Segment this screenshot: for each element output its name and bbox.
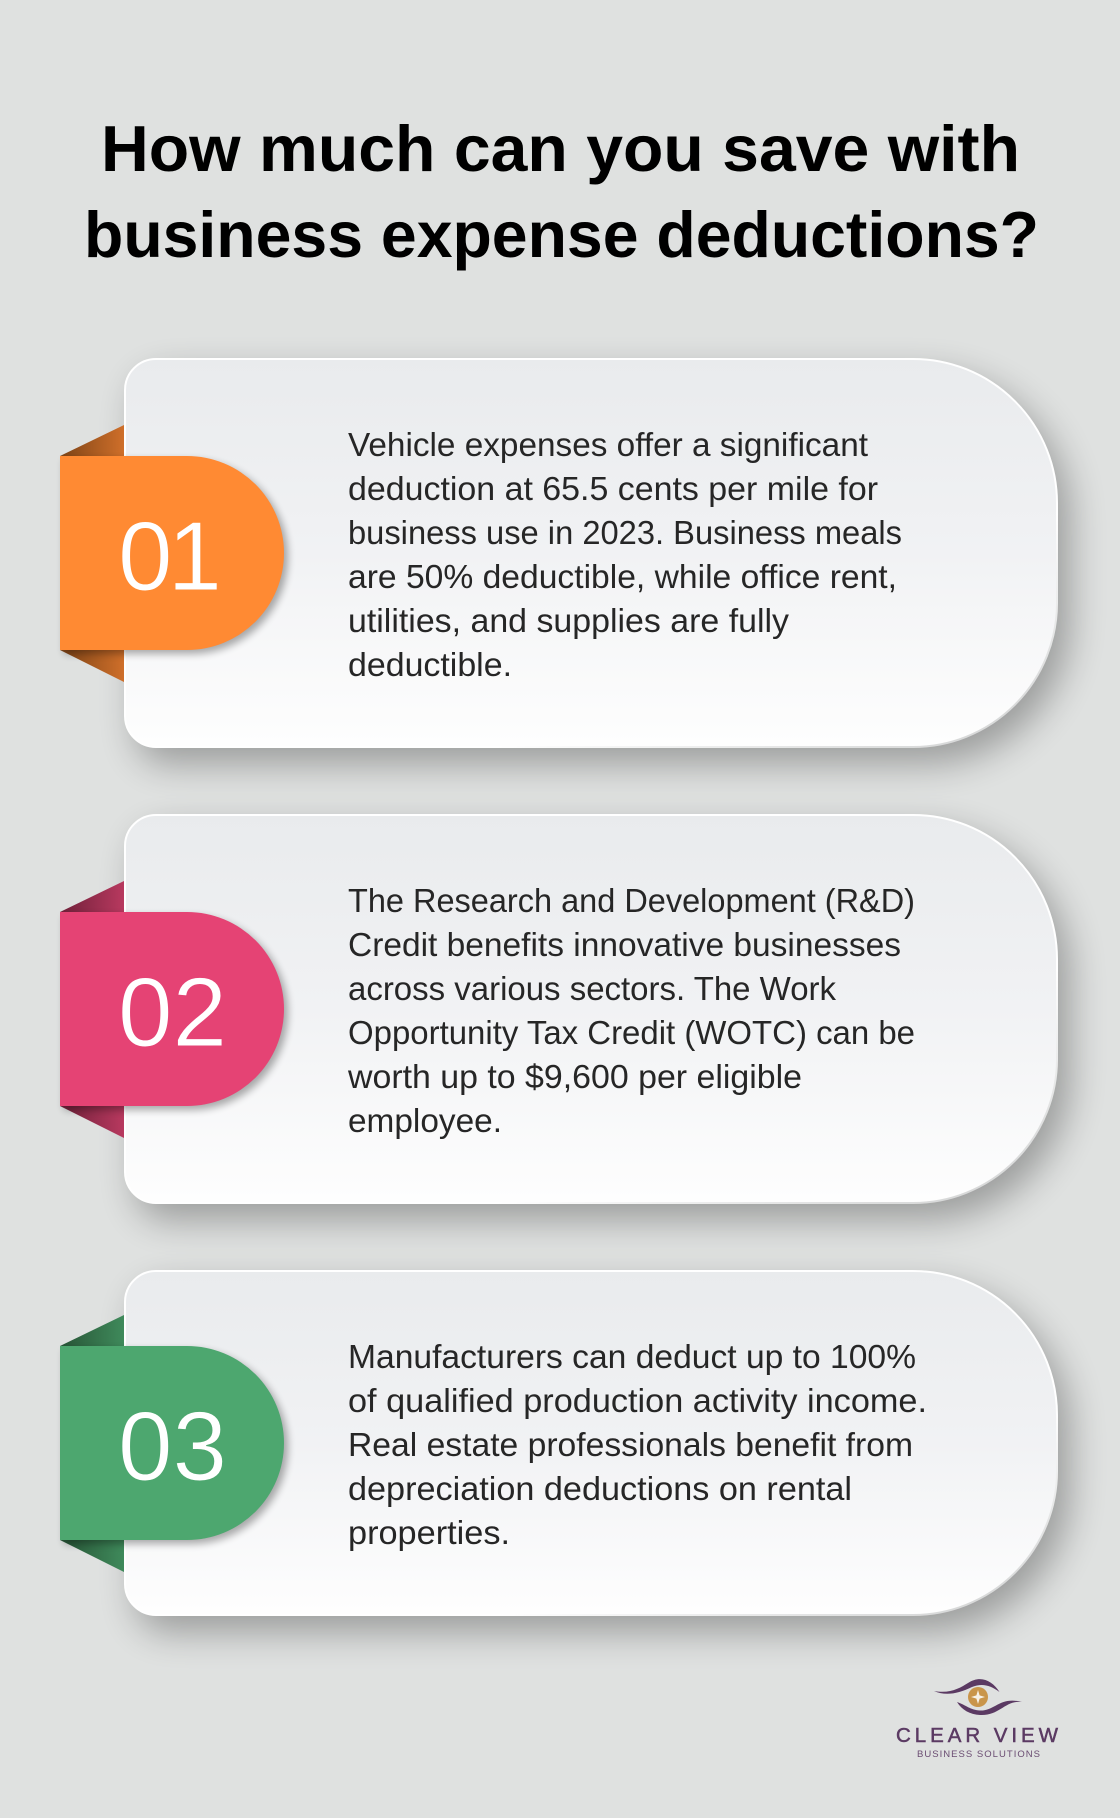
description text 02: across various sectors. The Work — [348, 970, 836, 1007]
card background — [125, 359, 1057, 747]
description text 01: deductible. — [348, 646, 512, 683]
title: business expense deductions? — [84, 198, 1039, 271]
description text 01: deduction at 65.5 cents per mile for — [348, 470, 878, 507]
description text 01: utilities, and supplies are fully — [348, 602, 790, 639]
description text 03: depreciation deductions on rental — [348, 1470, 852, 1507]
number badge 02: 02 — [118, 957, 227, 1067]
logo: Clear View Business Solutions — [896, 1679, 1059, 1760]
description text 03: Real estate professionals benefit from — [348, 1426, 913, 1463]
title: How much can you save with — [101, 112, 1020, 185]
panel: item 03 manufacturers and real estate — [60, 1271, 1070, 1632]
description text 03: Manufacturers can deduct up to 100% — [348, 1338, 916, 1375]
card background — [125, 815, 1057, 1203]
description text 01: are 50% deductible, while office rent, — [348, 558, 897, 595]
number badge 02 — [60, 912, 288, 1110]
number badge 01 — [60, 456, 288, 654]
number badge 03: 03 — [118, 1391, 227, 1501]
panel: item 02 credits — [60, 815, 1070, 1220]
description text 02: The Research and Development (R&D) — [348, 882, 915, 919]
card background — [125, 1271, 1057, 1615]
logo wordmark: CLEAR VIEW — [896, 1724, 1059, 1747]
description text 03: properties. — [348, 1514, 510, 1551]
logo tagline: BUSINESS SOLUTIONS — [917, 1749, 1040, 1760]
ribbon folds — [60, 881, 124, 1138]
icon: eye mark — [934, 1679, 1022, 1715]
title — [84, 112, 1039, 271]
number badge 01: 01 — [118, 501, 218, 611]
ribbon folds — [60, 1315, 124, 1572]
description text 01: business use in 2023. Business meals — [348, 514, 902, 551]
panel: item 01 vehicle expenses and meals — [60, 359, 1070, 764]
description text 02: Credit benefits innovative businesses — [348, 926, 901, 963]
description text 02: worth up to $9,600 per eligible — [347, 1058, 802, 1095]
description text 01 — [348, 426, 902, 683]
number badge 03 — [60, 1346, 288, 1544]
description text 01: Vehicle expenses offer a significant — [348, 426, 868, 463]
description text 02: employee. — [348, 1102, 502, 1139]
description text 03: of qualified production activity income. — [348, 1382, 927, 1419]
description text 02: Opportunity Tax Credit (WOTC) can be — [348, 1014, 915, 1051]
ribbon folds — [60, 425, 124, 682]
description text 03 — [348, 1338, 927, 1551]
description text 02 — [347, 882, 915, 1139]
